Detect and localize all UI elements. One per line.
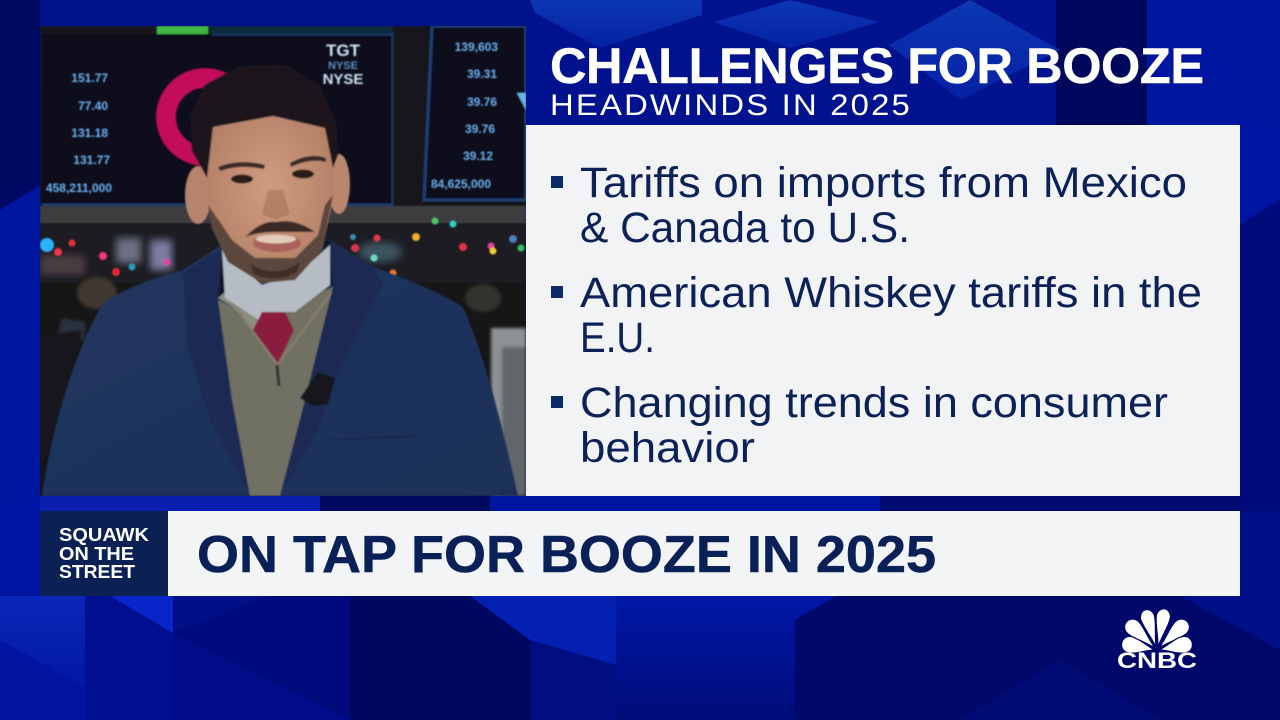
lapels [183, 248, 250, 496]
bullet 3 [551, 379, 1168, 472]
peacock feathers [1120, 608, 1194, 658]
bullet 3: behavior [580, 424, 755, 472]
lower third: show name: SQUAWK [59, 524, 150, 545]
nose shadow [262, 190, 290, 220]
ticker numbers on screens: NYSE [328, 60, 358, 72]
lower third: show name: ON THE [59, 543, 134, 564]
ticker numbers on screens: NYSE [323, 71, 363, 88]
ticker numbers on screens: TGT [326, 41, 361, 60]
wordmark: CNBC [1117, 648, 1197, 673]
ticker numbers on screens: 39.76 [467, 95, 497, 109]
jacket [42, 240, 518, 496]
ticker numbers on screens: 458,211,000 [46, 181, 112, 195]
lapel mic [300, 372, 335, 406]
brows and eyes [218, 162, 265, 171]
holiday lights [40, 218, 524, 276]
ticker numbers on screens: 151.77 [71, 71, 108, 85]
ticker numbers on screens: 39.31 [467, 67, 497, 81]
ticker numbers on screens: 84,625,000 [431, 177, 491, 191]
bullet 2 [551, 269, 1202, 362]
tie [253, 312, 294, 363]
ticker numbers on screens: 131.77 [73, 153, 110, 167]
bullet 1: & Canada to U.S. [580, 204, 910, 252]
studio background [40, 26, 526, 496]
bullet 2: American Whiskey tariffs in the [580, 269, 1202, 317]
ticker numbers on screens: 77.40 [78, 99, 108, 113]
lower third: show name [40, 511, 168, 596]
sweater [218, 287, 333, 496]
panel: bullet list [526, 125, 1240, 496]
bullet 1: Tariffs on imports from Mexico [580, 159, 1187, 207]
bullet 1 [551, 159, 1187, 252]
video panel: studio presenter [40, 26, 526, 496]
subheading: HEADWINDS IN 2025 [550, 89, 912, 122]
ticker numbers on screens [46, 40, 498, 195]
bullet 2: E.U. [580, 314, 655, 362]
beard [208, 195, 333, 283]
icon: CNBC logo [1117, 608, 1197, 673]
ticker numbers on screens: 39.12 [463, 149, 493, 163]
head [185, 166, 211, 224]
mouth [253, 234, 301, 252]
background people and set panel [40, 277, 526, 496]
hair [190, 65, 338, 178]
lower third: headline [168, 511, 1240, 596]
shirt collar [222, 245, 330, 322]
lower third: headline: ON TAP FOR BOOZE IN 2025 [197, 526, 936, 584]
bullet 3: Changing trends in consumer [580, 379, 1168, 427]
presenter [42, 65, 518, 496]
ticker numbers on screens: 131.18 [71, 126, 108, 140]
heading: CHALLENGES FOR BOOZE [550, 37, 1204, 94]
ticker numbers on screens: 139,603 [455, 40, 498, 54]
lower third: show name: STREET [59, 561, 136, 582]
ticker numbers on screens: 39.76 [465, 122, 495, 136]
